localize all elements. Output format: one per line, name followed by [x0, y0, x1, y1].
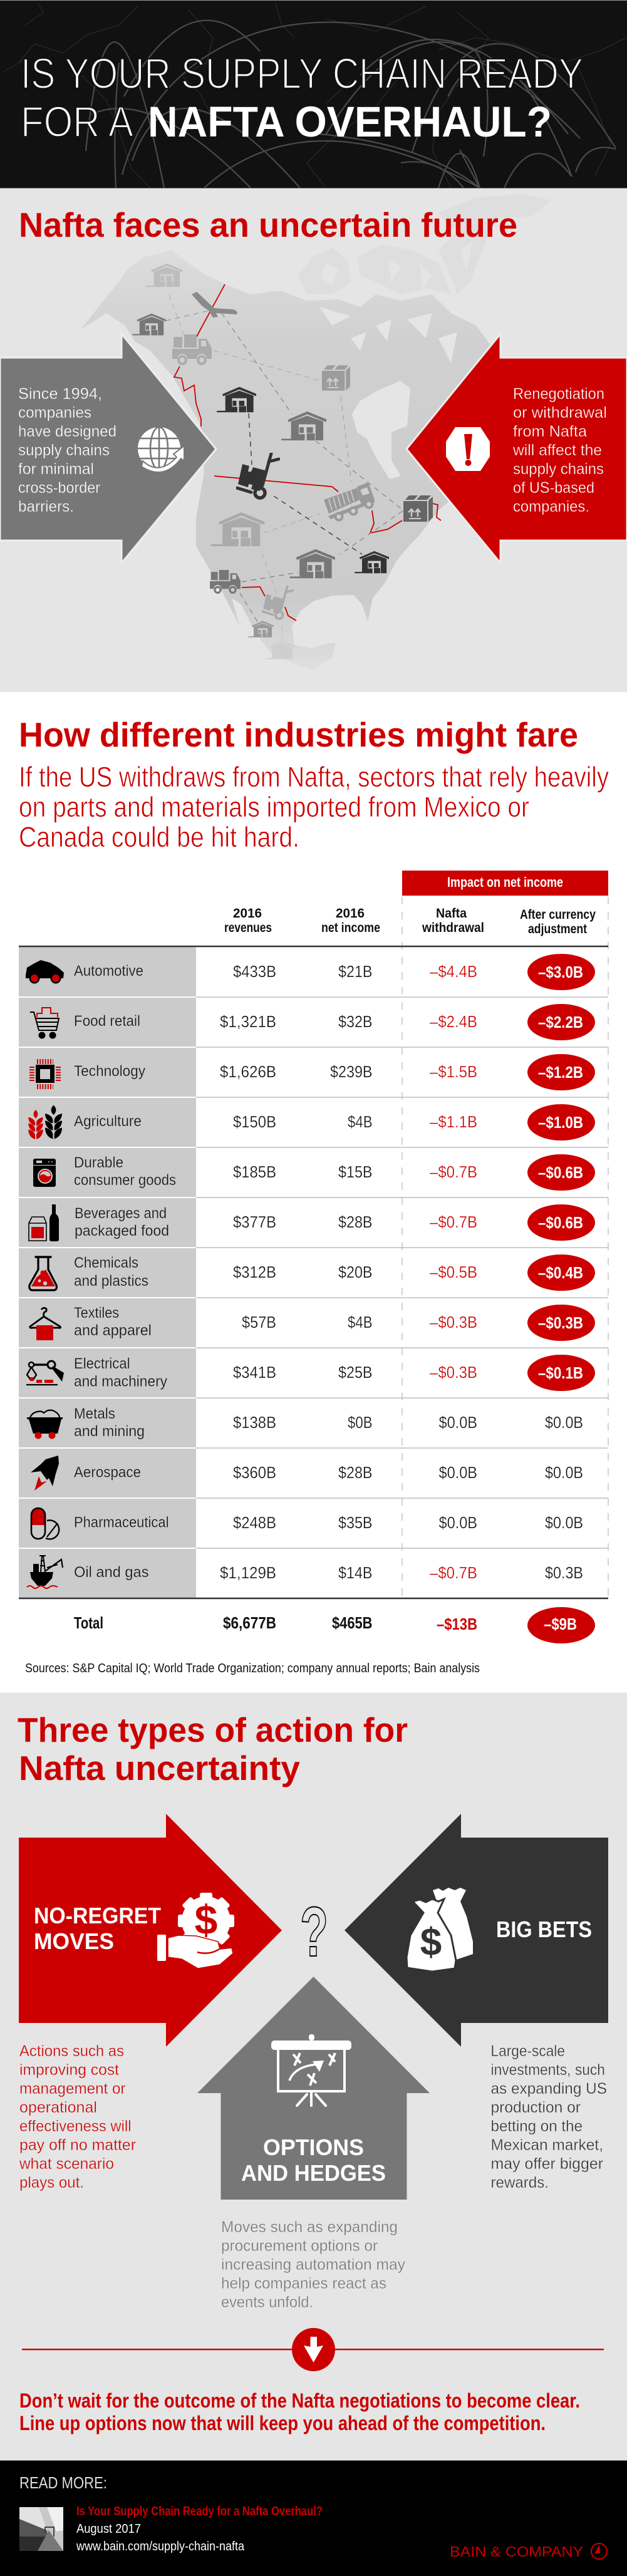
title: FOR A [21, 98, 133, 146]
row: Aerospace [31, 1456, 583, 1491]
table column headers: After currency [520, 908, 596, 922]
row: Food retail [30, 1004, 595, 1040]
row: Pharmaceutical: Pharmaceutical [74, 1514, 169, 1531]
row: Aerospace: $360B [233, 1463, 276, 1482]
icon: microchip [32, 1062, 58, 1087]
table row shading [19, 947, 196, 1598]
text block: options description: Moves such as expanding [221, 2218, 398, 2236]
arrow: no-regret moves: MOVES [34, 1928, 114, 1954]
row: Automotive: $433B [233, 962, 276, 981]
icon: hanger with garment [30, 1308, 61, 1340]
text block: no-regret description: operational [19, 2099, 97, 2116]
row: Technology: –$1.2B [538, 1063, 583, 1082]
row: Beverages and packaged food [29, 1204, 595, 1241]
icon: warehouse US west [211, 514, 263, 546]
row: Chemicals and plastics: –$0.5B [430, 1263, 477, 1281]
heading: How different industries might fare: How different industries might fare [19, 715, 578, 754]
row: Agriculture: –$1.0B [538, 1113, 583, 1132]
icon: oil rig [27, 1556, 63, 1588]
row: Metals and mining: Metals [74, 1405, 115, 1422]
row: Oil and gas: $14B [338, 1563, 372, 1582]
icon: hand cart [237, 453, 279, 498]
icon: hand cart faded [262, 586, 293, 619]
text block: options description: help companies react as [221, 2275, 386, 2292]
row: Technology [32, 1054, 595, 1090]
panel: header banner [0, 0, 627, 189]
icon: warehouse faded north [146, 265, 182, 287]
row: Textiles and apparel: Textiles [74, 1305, 119, 1322]
row: Beverages and packaged food: packaged food [75, 1223, 169, 1239]
icon: warehouse Mexico faint [266, 641, 294, 660]
row: Total [74, 1607, 595, 1643]
text block: industries intro [19, 761, 609, 853]
row: Technology: –$1.5B [430, 1062, 477, 1081]
table header: impact on net income: Impact on net income [447, 874, 563, 890]
row: Chemicals and plastics: Chemicals [74, 1254, 138, 1271]
heading: Three types of action [18, 1710, 408, 1787]
row: Food retail: $32B [338, 1012, 372, 1031]
row: Durable consumer goods: Durable [74, 1154, 123, 1171]
read more label: READ MORE: [19, 2473, 107, 2492]
row: Pharmaceutical: $0.0B [545, 1513, 583, 1532]
row: Total: –$9B [544, 1615, 577, 1633]
map: North America [81, 194, 551, 670]
text block: no-regret description: Actions such as [19, 2042, 124, 2060]
row: Food retail: –$2.2B [538, 1013, 583, 1032]
table column headers: net income [321, 921, 380, 935]
row: Automotive: Automotive [74, 963, 143, 980]
row: Textiles and apparel: $4B [348, 1313, 372, 1332]
text block: no-regret description: plays out. [19, 2174, 84, 2191]
text block: left arrow: for minimal [18, 460, 94, 478]
row: Technology: Technology [74, 1063, 145, 1080]
row: Automotive: $21B [338, 962, 372, 981]
row: Textiles and apparel: –$0.3B [430, 1313, 477, 1332]
icon: warehouse dark [217, 388, 256, 412]
text block: no-regret description: improving cost [19, 2061, 119, 2079]
icon: warehouse Mexico [248, 622, 273, 638]
row: Food retail: –$2.4B [430, 1012, 477, 1031]
text block: right arrow: companies. [513, 498, 589, 515]
text block: no-regret description [19, 2042, 136, 2191]
arrow: left gray [0, 334, 216, 563]
row: Automotive: –$4.4B [430, 962, 477, 981]
heading: Three types of action: Three types of action for [18, 1710, 408, 1749]
sources note: Sources: S&P Capital IQ; World Trade Organization; company annual reports; Bain analysis [25, 1662, 480, 1675]
arrow: big bets [345, 1814, 608, 2047]
row: Metals and mining: and mining [74, 1423, 145, 1440]
row: Metals and mining: $138B [233, 1413, 276, 1432]
text block: left arrow: cross-border [18, 479, 100, 497]
row: Chemicals and plastics: $20B [338, 1263, 372, 1281]
panel: footer [0, 2460, 627, 2576]
arrow: no-regret moves: NO-REGRET [34, 1903, 161, 1928]
row: Electrical and machinery [26, 1355, 595, 1391]
text block: no-regret description: management or [19, 2080, 125, 2098]
divider with down arrow [22, 2328, 604, 2371]
row: Textiles and apparel [30, 1305, 595, 1341]
icon: flask [29, 1257, 56, 1290]
row: Chemicals and plastics: –$0.4B [538, 1263, 583, 1282]
icon: warning octagon [446, 427, 490, 471]
row: Durable consumer goods: $15B [338, 1162, 372, 1181]
panel: three types of action background [0, 1692, 627, 2460]
row: Electrical and machinery: $25B [338, 1363, 372, 1382]
icon: warehouse central Canada [281, 413, 326, 440]
row: Technology: $1,626B [220, 1062, 276, 1081]
arrow: options and hedges: OPTIONS [263, 2134, 364, 2160]
panel: footer: Is Your Supply Chain Ready for a Nafta Overhaul? [76, 2505, 323, 2518]
row: Total: –$13B [437, 1615, 477, 1633]
text block: right arrow: or withdrawal [513, 404, 607, 422]
text block: left arrow: supply chains [18, 442, 110, 459]
icon: pickup truck southwest [210, 570, 241, 592]
title [21, 49, 583, 146]
row: Automotive: –$3.0B [538, 963, 583, 981]
text block: big bets description: as expanding US [491, 2080, 607, 2098]
row: Total: $6,677B [223, 1613, 276, 1632]
text block: right arrow [512, 385, 607, 515]
text block: right arrow: Renegotiation [513, 385, 604, 403]
heading: Nafta faces an uncertain future: Nafta faces an uncertain future [19, 205, 517, 244]
icon: warehouse US southeast [355, 552, 388, 573]
icon: gear and hand with dollar: $ [195, 1896, 217, 1943]
text block: options description [221, 2218, 405, 2311]
table column headers: 2016 [233, 906, 262, 921]
text block: industries intro: Canada could be hit hard. [19, 821, 299, 853]
logo: Bain & Company: BAIN & COMPANY [450, 2543, 583, 2560]
icon: carton and bottle [29, 1204, 59, 1241]
row: Durable consumer goods: –$0.7B [430, 1162, 477, 1181]
text block: left arrow: have designed [18, 423, 117, 440]
heading: Three types of action: Nafta uncertainty [19, 1749, 300, 1787]
icon: warehouse west Canada [132, 314, 165, 335]
row: Pharmaceutical: $0.0B [438, 1513, 477, 1532]
title: NAFTA OVERHAUL? [148, 98, 552, 146]
row: Chemicals and plastics: $312B [233, 1263, 276, 1281]
table column headers: revenues [224, 921, 272, 935]
icon: box east [403, 495, 433, 522]
text block: big bets description: rewards. [491, 2174, 549, 2191]
row: Agriculture: –$1.1B [430, 1112, 477, 1131]
table column headers: Nafta [436, 906, 467, 921]
text block: industries intro: on parts and materials imported from Mexico or [19, 791, 529, 823]
row: Total: $465B [332, 1613, 372, 1632]
text block: big bets description [491, 2042, 607, 2191]
text block: big bets description: Mexican market, [491, 2136, 603, 2154]
row: Total: Total [74, 1613, 103, 1632]
row: Chemicals and plastics: and plastics [74, 1273, 148, 1290]
text block: no-regret description: effectiveness will [19, 2118, 132, 2135]
row: Textiles and apparel: –$0.3B [538, 1313, 583, 1332]
table column headers: withdrawal [422, 921, 484, 935]
row: Food retail: $1,321B [220, 1012, 276, 1031]
row: Oil and gas [27, 1556, 583, 1588]
row: Food retail: Food retail [74, 1013, 140, 1030]
row: Agriculture [28, 1104, 595, 1141]
text block: big bets description: Large-scale [491, 2042, 565, 2060]
row: Beverages and packaged food: –$0.7B [430, 1213, 477, 1231]
row: Electrical and machinery: Electrical [74, 1355, 130, 1372]
row: Aerospace: $0.0B [545, 1463, 583, 1482]
icon: pickup truck faded [172, 334, 212, 364]
row: Durable consumer goods: consumer goods [74, 1172, 176, 1189]
row: Beverages and packaged food: $377B [233, 1213, 276, 1231]
callout: call to action: Line up options now that will keep you ahead of the competition. [19, 2412, 546, 2434]
row: Metals and mining: $0.0B [545, 1413, 583, 1432]
row: Agriculture: $4B [348, 1112, 372, 1131]
row: Aerospace: Aerospace [74, 1464, 141, 1481]
row: Chemicals and plastics [29, 1254, 595, 1291]
table column headers: adjustment [528, 922, 587, 936]
icon: money bags: $ [420, 1921, 442, 1964]
row: Durable consumer goods: $185B [233, 1162, 276, 1181]
panel: Nafta uncertain future background [0, 189, 627, 692]
row: Agriculture: $150B [233, 1112, 276, 1131]
row: Oil and gas: Oil and gas [74, 1564, 149, 1581]
icon: wheat [28, 1105, 62, 1139]
supply routes: dashed lines [166, 295, 403, 638]
border lines: red [174, 284, 441, 621]
row: Technology: $239B [330, 1062, 372, 1081]
table: industries impact [19, 871, 608, 1643]
row: Aerospace: $28B [338, 1463, 372, 1482]
icon: robot arm [26, 1361, 64, 1385]
icon: money bags [407, 1888, 473, 1972]
text block: big bets description: betting on the [491, 2118, 583, 2135]
icon: gear and hand with dollar [157, 1893, 234, 1968]
row: Metals and mining: $0B [348, 1413, 372, 1432]
text block: options description: events unfold. [221, 2294, 313, 2311]
text block: right arrow: supply chains [513, 460, 604, 478]
callout: call to action [19, 2389, 580, 2434]
row: Beverages and packaged food: Beverages and [75, 1205, 167, 1222]
arrow: options and hedges: AND HEDGES [241, 2160, 386, 2186]
text block: options description: procurement options or [221, 2237, 378, 2255]
row: Electrical and machinery: –$0.3B [430, 1363, 477, 1382]
arrow: big bets: BIG BETS [496, 1916, 592, 1942]
row: Electrical and machinery: $341B [233, 1363, 276, 1382]
icon: washing machine [33, 1159, 56, 1187]
row: Automotive [26, 954, 595, 990]
arrow: right red [407, 334, 627, 563]
text block: right arrow: will affect the [512, 442, 602, 459]
icon: airplane [192, 292, 237, 318]
text block: big bets description: may offer bigger [491, 2155, 603, 2173]
row: Pharmaceutical: $35B [338, 1513, 372, 1532]
icon: strategy board [271, 2034, 351, 2106]
row: Metals and mining [27, 1405, 583, 1440]
row: Beverages and packaged food: –$0.6B [538, 1213, 583, 1232]
table column headers: 2016 [336, 906, 365, 921]
row: Electrical and machinery: and machinery [74, 1373, 167, 1390]
icon: pills [31, 1508, 59, 1539]
row: Metals and mining: $0.0B [438, 1413, 477, 1432]
text block: left arrow: companies [18, 404, 91, 422]
table column headers [224, 906, 596, 936]
row: Textiles and apparel: and apparel [74, 1322, 152, 1339]
text block: right arrow: of US-based [513, 479, 594, 497]
icon: question mark: ? [300, 1893, 328, 1971]
icon: rocket [31, 1456, 59, 1491]
text block: big bets description: production or [491, 2099, 581, 2116]
row: Oil and gas: $0.3B [545, 1563, 583, 1582]
text block: big bets description: investments, such [491, 2061, 605, 2079]
panel: footer: August 2017 [76, 2522, 141, 2536]
arrow: no-regret moves [19, 1814, 282, 2047]
row: Pharmaceutical: $248B [233, 1513, 276, 1532]
row: Oil and gas: $1,129B [220, 1563, 276, 1582]
icon: mine cart [27, 1410, 63, 1439]
text block: no-regret description: pay off no matter [19, 2136, 136, 2154]
text block: right arrow: from Nafta [513, 423, 587, 440]
text block: options description: increasing automation may [221, 2256, 405, 2273]
row: Electrical and machinery: –$0.1B [538, 1363, 583, 1382]
row: Durable consumer goods: –$0.6B [538, 1163, 583, 1182]
row: Pharmaceutical [31, 1508, 583, 1539]
text block: left arrow [18, 385, 117, 515]
arrow: options and hedges [197, 1977, 430, 2200]
panel: footer: www.bain.com/supply-chain-nafta [76, 2540, 245, 2553]
icon: car [26, 960, 64, 983]
row: Oil and gas: –$0.7B [430, 1563, 477, 1582]
text block: no-regret description: what scenario [19, 2155, 114, 2173]
report cover thumbnail [19, 2507, 63, 2551]
row: Beverages and packaged food: $28B [338, 1213, 372, 1231]
icon: globe with arrow [138, 427, 184, 472]
icon: shopping cart [30, 1008, 59, 1038]
text block: left arrow: Since 1994, [18, 385, 102, 403]
row: Aerospace: $0.0B [438, 1463, 477, 1482]
icon: dump truck [324, 482, 375, 520]
row: Textiles and apparel: $57B [242, 1313, 276, 1332]
icon: warehouse US central [289, 551, 334, 578]
row: Durable consumer goods [33, 1154, 595, 1191]
icon: box faded [322, 365, 350, 391]
text block: left arrow: barriers. [18, 498, 74, 515]
row: Agriculture: Agriculture [74, 1113, 142, 1130]
table header: impact on net income [402, 871, 608, 896]
